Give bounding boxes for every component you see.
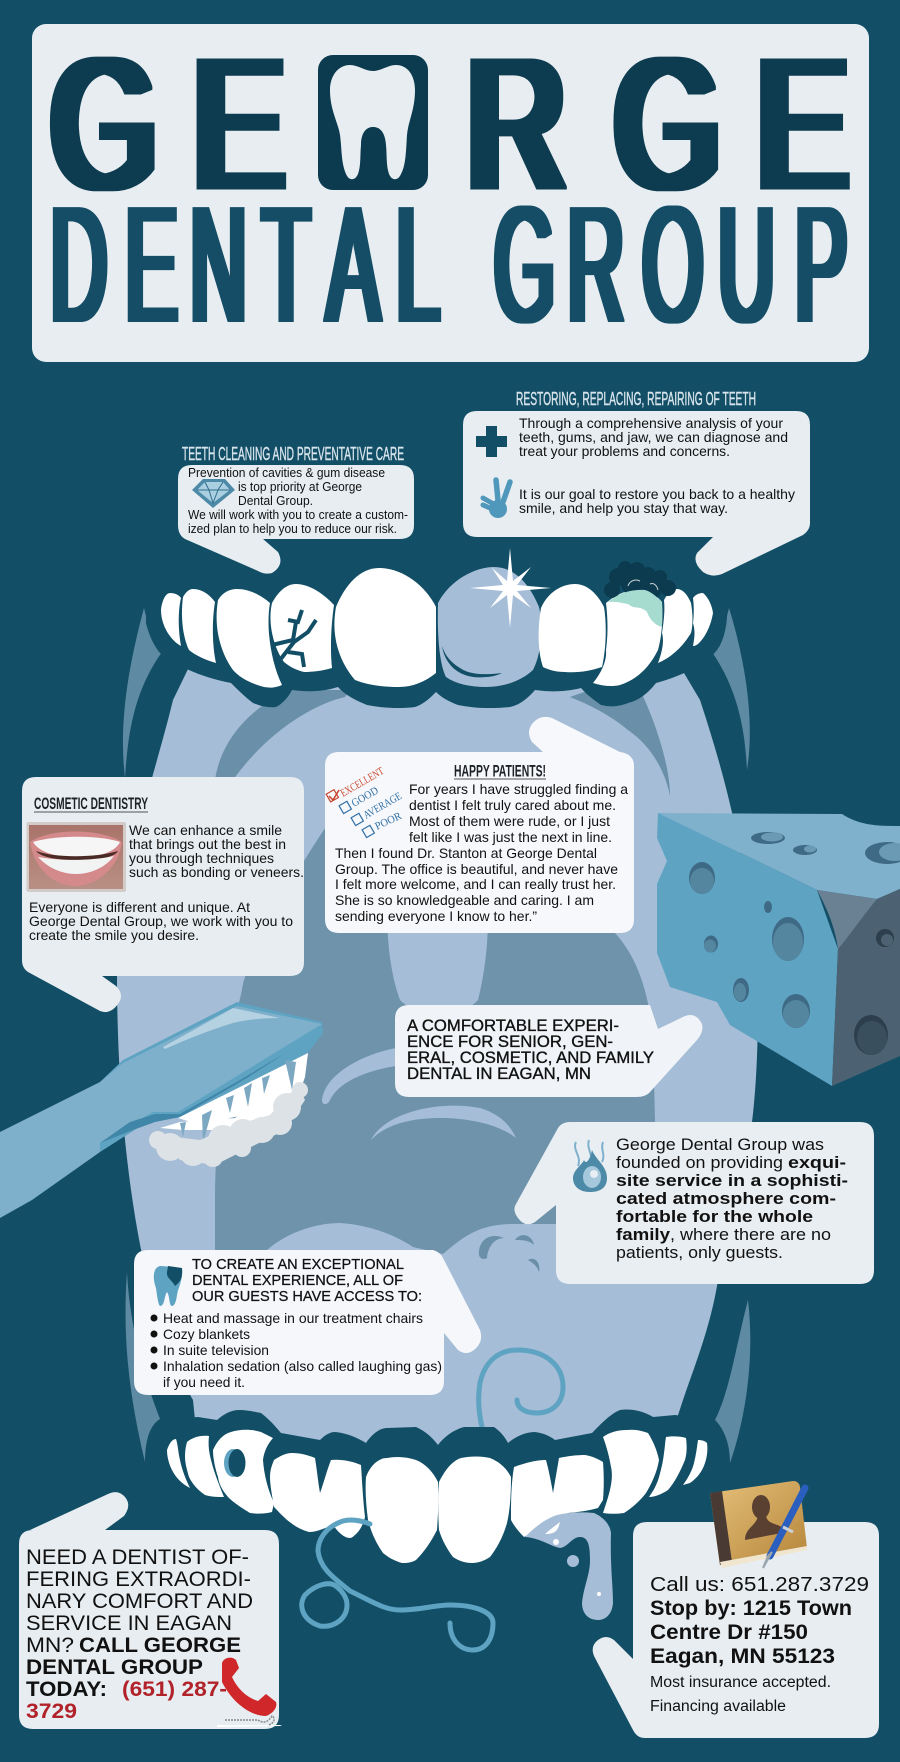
floss lower [302,1520,493,1650]
icon: tooth crack [272,610,316,667]
text: testimonial: Group. The office is beautiful, and never have [335,861,618,877]
cheese top face [658,813,900,899]
text: testimonial: For years I have struggled finding a [409,781,628,797]
crescent on blue tooth [442,646,502,677]
list: amenities: Cozy blankets [163,1326,250,1342]
palate arc right [570,690,670,796]
floss upper [479,1350,563,1427]
icon: diamond [192,479,235,508]
text: cosmetic body: We can enhance a smile [129,822,282,838]
text: need a dentist: (651) 287- [122,1677,227,1701]
lower gum [145,1409,730,1600]
text: testimonial: Most of them were rude, or I just [409,813,610,829]
icon: flame [573,1140,607,1192]
text: prevention: Dental Group. [238,493,313,508]
foam and bristles [149,1053,308,1167]
title: GEORGE: GEORGE [51,20,848,228]
text: contact details: Centre Dr #150 [650,1620,808,1644]
text: comfortable [407,1017,654,1083]
text: analysis: treat your problems and concerns. [519,443,730,459]
text: cosmetic body: that brings out the best in [129,836,286,852]
drool drop [525,1512,613,1620]
panel: restoring [463,411,810,576]
text: testimonial: Then I found Dr. Stanton at George Dental [335,845,597,861]
heading: happy patients [454,762,546,780]
text: need a dentist: FERING EXTRAORDI- [26,1567,251,1591]
text: need a dentist: SERVICE IN EAGAN [26,1611,232,1635]
icon: rating checklist: GOOD [350,785,381,810]
text: prevention: Prevention of cavities & gum disease [188,465,385,480]
list: amenities: if you need it. [163,1374,245,1390]
panel: cosmetic dentistry [22,777,304,1012]
text: founded: site service in a sophisti- [616,1171,848,1190]
throat arc lower [371,1106,516,1140]
text: contact details: Eagan, MN 55123 [650,1644,835,1668]
tooth: blue central [438,567,542,687]
text: amenities heading: OUR GUESTS HAVE ACCESS TO: [192,1288,422,1305]
cheek sliver upper right [712,608,750,770]
upper gum [146,560,727,708]
panel: comfortable experience [395,1005,702,1097]
cheek sliver upper left [123,608,162,778]
text: comfortable: A COMFORTABLE EXPERI- [407,1017,619,1035]
text: prevention [188,465,408,536]
tongue dimples [479,1235,539,1272]
icon: red phone [217,1658,282,1727]
text: analysis: teeth, gums, and jaw, we can diagnose and [519,429,788,445]
text: founded: cated atmosphere com- [616,1189,836,1208]
palate arc left [215,690,350,780]
text: analysis: It is our goal to restore you back to a healthy [519,486,795,502]
cheek sliver lower left [126,1272,160,1462]
text: cosmetic body: you through techniques [129,850,274,866]
text: comfortable: ENCE FOR SENIOR, GEN- [407,1033,613,1051]
list: amenities: Heat and massage in our treatment chairs [163,1310,423,1326]
text: need a dentist: NEED A DENTIST OF- [26,1545,249,1569]
tongue [215,1223,660,1440]
text: need a dentist: DENTAL GROUP [26,1655,203,1679]
icon: rating checklist [326,765,404,838]
cheese holes [689,832,900,1055]
title panel [32,20,869,362]
text: cosmetic body: such as bonding or veneers. [129,864,304,880]
icon: address book [710,1481,807,1568]
text: founded: exqui- [788,1153,846,1172]
heading: cosmetic [34,794,148,813]
text: prevention: is top priority at George [238,479,362,494]
icon: plus [476,426,507,457]
lower teeth [167,1430,707,1563]
icon: rating checklist: AVERAGE [362,790,404,822]
text: need a dentist: CALL GEORGE [79,1633,241,1657]
text: testimonial: sending everyone I know to her.” [335,908,537,924]
text: prevention: We will work with you to create a custom- [188,507,408,522]
throat arc upper [322,1048,396,1104]
list: amenities: Inhalation sedation (also called laughing gas) [163,1358,442,1374]
tooth cavity [224,1449,246,1477]
heading: cosmetic: COSMETIC DENTISTRY [34,794,148,813]
cheek sliver lower right [715,1300,750,1463]
toothbrush [0,1002,323,1218]
text: analysis: Through a comprehensive analysis of your [519,415,783,431]
panel: contact [593,1481,879,1738]
text: founded: , where there are no [670,1225,831,1244]
text: amenities heading [192,1256,422,1305]
text: contact details: Financing available [650,1698,786,1715]
title: DENTAL GROUP: DENTAL GROUP [50,174,847,357]
icon: sparkle [470,548,551,628]
icon: rating checklist: EXCELLENT [338,765,386,800]
photo: smile [26,822,126,892]
text: prevention: ized plan to help you to reduce our risk. [188,521,397,536]
text: testimonial: I felt more welcome, and I can really trust her. [335,876,616,892]
text: founded [616,1135,848,1262]
text: cosmetic body: Everyone is different and unique. At [29,899,250,915]
text: need a dentist: TODAY: [26,1677,107,1701]
icon: tooth tile in logo [318,55,428,190]
upper teeth [161,567,713,688]
cheese front face [657,813,838,1086]
panel: happy patients [325,717,634,933]
list: amenities [150,1310,442,1390]
text: analysis: smile, and help you stay that way. [519,500,728,516]
uvula [387,860,488,1015]
text: need a dentist: 3729 [26,1699,77,1723]
text: testimonial: She is so knowledgeable and caring. I am [335,892,594,908]
cheese [657,813,900,1086]
text: cosmetic body: create the smile you desire. [29,927,199,943]
text: founded: fortable for the whole [616,1207,813,1226]
text: testimonial: dentist I felt truly cared about me. [409,797,616,813]
heading: teeth cleaning: TEETH CLEANING AND PREVENTATIVE CARE [182,444,404,464]
heading: happy patients: HAPPY PATIENTS! [454,762,546,780]
list: amenities: In suite television [163,1342,269,1358]
cheese side face [832,889,900,1086]
text: need a dentist [26,1545,253,1723]
text: amenities heading: DENTAL EXPERIENCE, ALL OF [192,1272,403,1289]
panel: founded on service [514,1122,874,1284]
text: comfortable: DENTAL IN EAGAN, MN [407,1065,591,1083]
icon: plaque on tooth [604,561,676,627]
text: analysis [519,415,795,516]
text: contact details: Stop by: 1215 Town [650,1596,852,1620]
text: founded: family [616,1225,671,1244]
text: testimonial: felt like I was just the next in line. [409,829,612,845]
text: contact details: Call us: 651.287.3729 [650,1574,869,1596]
text: amenities heading: TO CREATE AN EXCEPTIONAL [192,1256,404,1273]
text: founded: patients, only guests. [616,1243,783,1262]
mouth: dark throat area [215,800,655,1270]
text: contact details: Most insurance accepted. [650,1674,831,1691]
panel: teeth cleaning [178,465,414,574]
icon: peace hand [483,480,510,518]
text: cosmetic body: George Dental Group, we work with you to [29,913,293,929]
text: need a dentist: NARY COMFORT AND [26,1589,253,1613]
text: founded: George Dental Group was [616,1135,824,1154]
text: founded: founded on providing [616,1153,783,1172]
panel: guest amenities [134,1250,481,1395]
icon: pen [763,1488,805,1568]
text: testimonial [335,781,628,924]
panel: call to action [19,1492,282,1729]
icon: tooth [154,1266,182,1306]
icon: rating checklist: POOR [373,810,404,833]
text: contact details [650,1574,869,1715]
text: need a dentist: MN? [26,1633,74,1657]
mouth interior [117,665,758,1470]
text: cosmetic body [29,822,304,943]
text: comfortable: ERAL, COSMETIC, AND FAMILY [407,1049,654,1067]
